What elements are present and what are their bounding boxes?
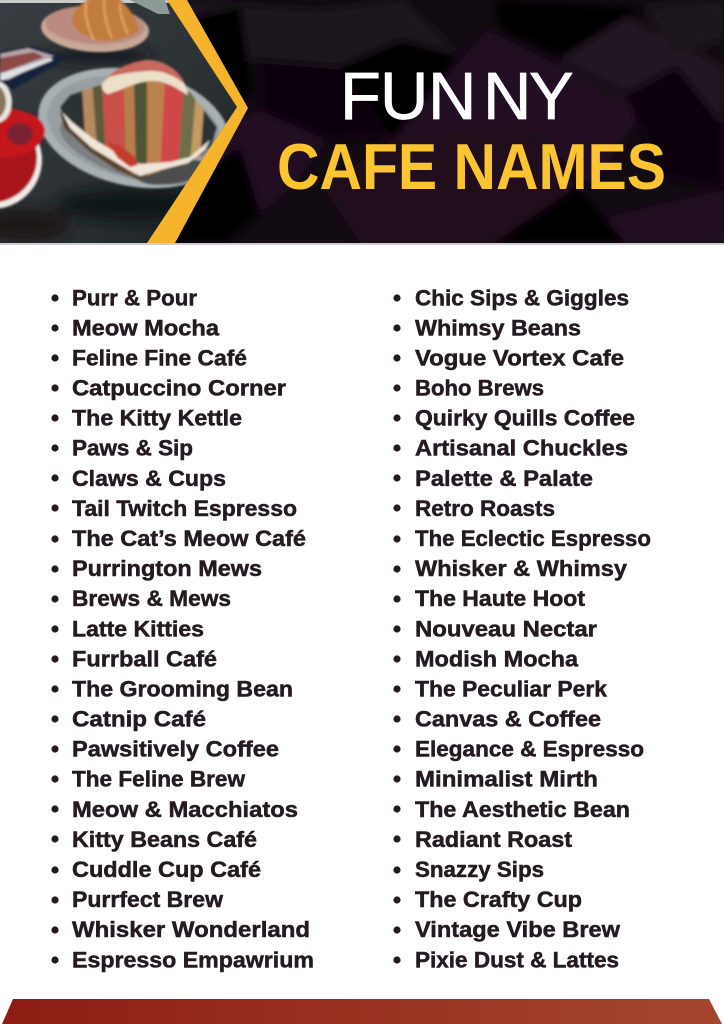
background facets xyxy=(173,0,724,243)
name: Cuddle Cup Café xyxy=(72,857,261,882)
name: Furrball Café xyxy=(72,646,217,671)
name: Elegance & Espresso xyxy=(415,737,644,762)
name: The Haute Hoot xyxy=(415,586,586,611)
red cup and saucer xyxy=(0,142,44,210)
name: Whimsy Beans xyxy=(415,315,581,340)
name: Espresso Empawrium xyxy=(72,947,314,972)
name: The Grooming Bean xyxy=(72,676,293,702)
croissant body xyxy=(80,91,84,129)
photo: croissant on cafe table xyxy=(0,0,250,243)
right name list xyxy=(393,285,651,972)
name: Purrington Mews xyxy=(72,556,262,581)
left name list xyxy=(51,285,314,972)
notebook xyxy=(0,46,68,90)
name: Snazzy Sips xyxy=(415,857,544,882)
crust under croissant xyxy=(60,112,155,180)
header banner xyxy=(0,0,724,245)
name: The Feline Brew xyxy=(72,767,246,792)
name: Brews & Mews xyxy=(72,586,231,611)
name: Minimalist Mirth xyxy=(415,767,598,792)
name: The Cat’s Meow Café xyxy=(72,526,306,551)
name: Catpuccino Corner xyxy=(72,376,286,401)
name: The Aesthetic Bean xyxy=(415,797,630,822)
name: Canvas & Coffee xyxy=(415,707,601,732)
name: Radiant Roast xyxy=(415,827,573,852)
name: Claws & Cups xyxy=(72,466,226,491)
name: Retro Roasts xyxy=(415,496,555,521)
name: Meow & Macchiatos xyxy=(72,797,298,822)
name: Pixie Dust & Lattes xyxy=(415,947,619,972)
name: Boho Brews xyxy=(415,376,544,401)
top pastry crest xyxy=(102,60,188,95)
name: Modish Mocha xyxy=(415,646,579,671)
title: CAFE NAMES: CAFE NAMES xyxy=(277,130,666,203)
name: Artisanal Chuckles xyxy=(415,436,628,461)
small croissant xyxy=(72,0,139,41)
name: Chic Sips & Giggles xyxy=(415,285,629,310)
name: The Kitty Kettle xyxy=(72,406,242,431)
name: Paws & Sip xyxy=(72,436,193,461)
name: Vogue Vortex Cafe xyxy=(415,346,624,370)
name: Palette & Palate xyxy=(415,466,593,491)
name: Quirky Quills Coffee xyxy=(415,406,635,431)
large plate xyxy=(36,66,226,190)
name: Vintage Vibe Brew xyxy=(415,917,621,942)
name: Feline Fine Café xyxy=(72,346,247,370)
name: Whisker Wonderland xyxy=(72,917,310,942)
name: The Crafty Cup xyxy=(415,887,582,912)
name: The Eclectic Espresso xyxy=(415,526,651,551)
name: Whisker & Whimsy xyxy=(415,556,628,581)
footer band xyxy=(2,999,722,1024)
name: Catnip Café xyxy=(72,707,206,732)
small plate xyxy=(40,13,150,54)
title: FUNNY: FUNNY xyxy=(340,59,574,134)
name: Latte Kitties xyxy=(72,616,204,641)
name: Nouveau Nectar xyxy=(415,616,597,641)
cream and filling xyxy=(62,112,210,176)
name: Purrfect Brew xyxy=(72,887,224,912)
name: Purr & Pour xyxy=(72,285,197,310)
icon: yellow chevron xyxy=(147,0,248,243)
name: Tail Twitch Espresso xyxy=(72,496,297,521)
name: Meow Mocha xyxy=(72,315,220,340)
name: Pawsitively Coffee xyxy=(72,737,279,762)
name: The Peculiar Perk xyxy=(415,676,608,702)
name: Kitty Beans Café xyxy=(72,827,257,852)
